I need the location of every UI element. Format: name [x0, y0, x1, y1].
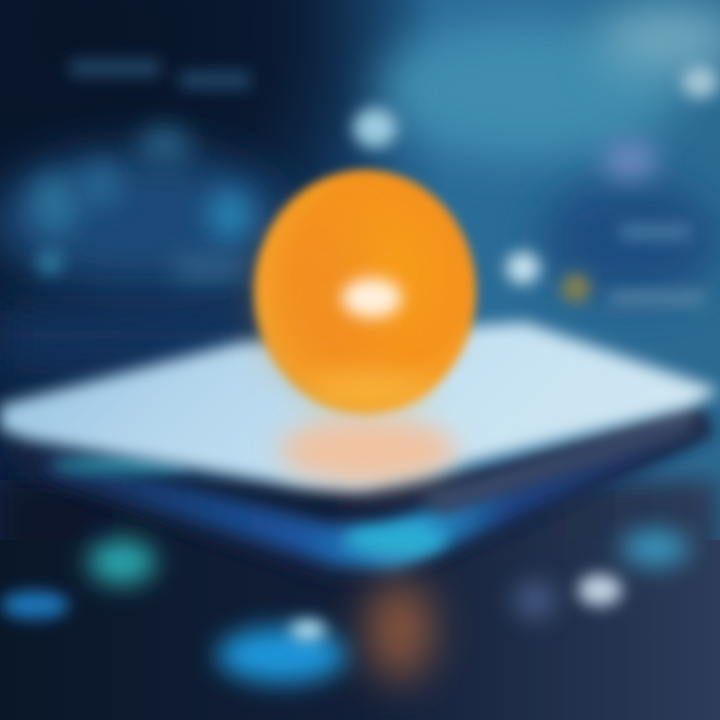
background: blurred data lights	[0, 60, 718, 360]
tablet: underside and glowing edge	[5, 405, 715, 580]
floor lights	[1, 530, 689, 683]
sphere highlight	[342, 278, 402, 318]
icon: orange sphere	[254, 170, 476, 414]
floor: dark reflective surface	[0, 480, 720, 720]
tablet: pale screen surface	[0, 322, 720, 490]
screen reflection of sphere	[280, 416, 456, 484]
